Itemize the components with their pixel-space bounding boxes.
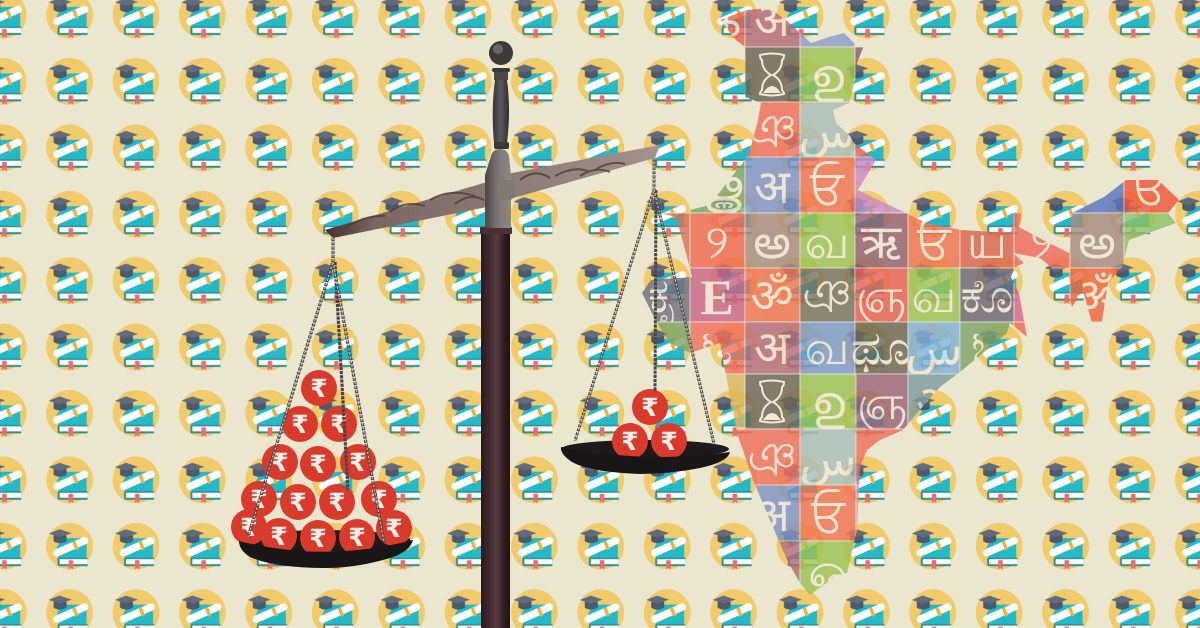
tiles: row 6: E	[700, 269, 734, 325]
tiles: row 8	[715, 374, 960, 433]
scale: vertical post	[481, 232, 510, 628]
left pan: bowl	[239, 540, 413, 568]
left rupee coins: ₹	[310, 374, 328, 403]
tiles: row 1	[720, 8, 855, 46]
tiles: row 8: ഉ	[811, 376, 845, 429]
tiles: row 3: س	[798, 104, 856, 158]
tiles: row 6: ஞ	[856, 269, 906, 326]
tiles: row 7: ಓ	[971, 321, 1003, 374]
tiles: row 6: வ	[912, 269, 956, 322]
right rupee coins: ₹	[660, 427, 678, 456]
right rupee coins: ₹	[641, 393, 659, 422]
right rupee coins	[612, 389, 687, 459]
tiles: row 4: ൠ	[702, 160, 743, 214]
left rupee coins: ₹	[330, 410, 348, 439]
tiles: row 5: ऋ	[861, 215, 902, 268]
left rupee coins	[231, 370, 412, 556]
left pan: chains	[248, 238, 384, 542]
icon: hourglass tile 2	[760, 380, 784, 422]
tiles: row 7: س	[905, 321, 963, 375]
tiles: row 9: ঞ	[747, 432, 797, 485]
tiles: row 6: ಕೊ	[960, 269, 1014, 322]
tiles: row 4	[690, 157, 1184, 214]
tiles: row 5: ୨	[1030, 215, 1054, 268]
tiles: row 3: ঞ	[747, 104, 797, 157]
left rupee coins: ₹	[349, 448, 367, 477]
left rupee coins: ₹	[309, 450, 327, 479]
tiles: row 4: ਓ	[1132, 160, 1168, 213]
tiles: row 8: अ	[916, 376, 953, 429]
left rupee coins: ₹	[309, 524, 327, 553]
tiles: row 10: ਓ	[810, 488, 846, 541]
scale: beam	[325, 145, 660, 238]
tiles: row 6: ঞ	[802, 269, 852, 322]
tiles: row 7: வ	[805, 321, 849, 374]
left rupee coins: ₹	[348, 523, 366, 552]
tiles: row 6: ॐ	[1076, 269, 1118, 322]
tiles: row 5: అ	[1078, 215, 1116, 268]
tiles: row 7: ಥೂ	[851, 321, 911, 374]
tiles: row 6: ಕೃ	[648, 269, 678, 326]
map of India: language tile mosaic	[636, 0, 1184, 601]
tiles: row 11	[779, 540, 854, 595]
tiles: row 5: అ	[753, 215, 791, 268]
left rupee coins: ₹	[370, 485, 388, 514]
scale: upper shaft and knob	[485, 41, 515, 228]
tiles: row 10	[755, 484, 860, 541]
left rupee coins: ₹	[250, 485, 268, 514]
left rupee coins: ₹	[240, 513, 258, 542]
tiles: row 5: வ	[805, 215, 849, 268]
right pan: bowl	[561, 447, 730, 474]
tiles: row 5: ਧ	[647, 215, 679, 268]
tiles: row 8: ஞ	[857, 376, 907, 433]
tiles: row 7	[636, 321, 1034, 375]
tiles: row 5: ਓ	[916, 215, 952, 268]
icon: hourglass tile 1	[760, 54, 784, 96]
left rupee coins: ₹	[271, 448, 289, 477]
tiles: row 4: अ	[754, 160, 791, 213]
left rupee coins: ₹	[289, 488, 307, 517]
tiles: row 10: अ	[754, 488, 791, 541]
right pan: back rim	[561, 440, 729, 458]
tiles: row 9	[730, 429, 908, 486]
tiles: row 5	[636, 213, 1184, 268]
tiles: row 6: ॐ	[751, 269, 793, 322]
tiles: row 5: ய	[967, 215, 1007, 268]
tiles: row 7: अ	[754, 321, 791, 374]
tiles: row 6	[636, 268, 1124, 326]
tiles: row 4: ਓ	[809, 160, 845, 213]
right rupee coins: ₹	[621, 427, 639, 456]
tiles: row 5: ര	[1133, 215, 1167, 268]
tiles: row 2: ഉ	[810, 49, 844, 102]
left rupee coins: ₹	[328, 488, 346, 517]
left pan: back rim	[239, 530, 411, 552]
tiles: row 5: ୨	[705, 215, 729, 268]
tiles: row 11: ஒ	[808, 544, 848, 601]
tiles: row 9: س	[799, 432, 857, 486]
scale: post collar	[480, 227, 512, 234]
tiles: row 3	[745, 102, 885, 158]
left rupee coins: ₹	[291, 410, 309, 439]
left rupee coins: ₹	[270, 522, 288, 551]
tiles: row 2	[745, 47, 875, 102]
right pan: chains	[575, 150, 714, 444]
tiles: row 7: ಓ	[701, 321, 733, 374]
left rupee coins: ₹	[385, 514, 403, 543]
